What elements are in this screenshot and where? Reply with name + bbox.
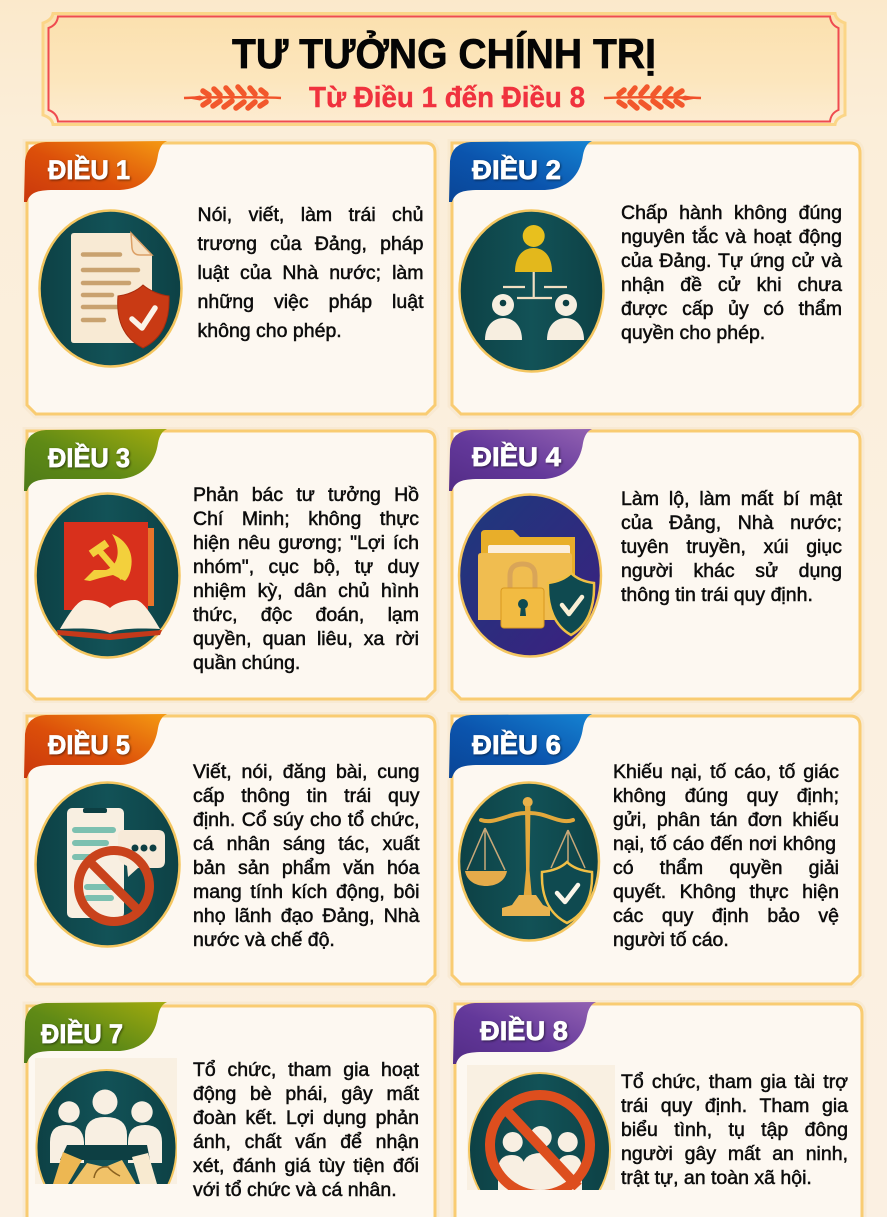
ribbon label bbox=[24, 1002, 167, 1063]
ribbon label: ĐIỀU 4 bbox=[472, 441, 561, 472]
text: Điều 6: không đúng quy định; bbox=[613, 785, 839, 807]
text: Điều 3: quyền, quan liêu, xa rời bbox=[193, 628, 419, 650]
text: Điều 6: nại, tố cáo đến nơi không bbox=[613, 833, 836, 855]
icon: phone with prohibition sign bbox=[34, 781, 181, 948]
icon: scales of justice with shield bbox=[458, 781, 600, 942]
panel: Điều 6 bbox=[448, 712, 864, 988]
text: Điều 6: người tố cáo. bbox=[613, 929, 729, 951]
text: Điều 4: của Đảng, Nhà nước; bbox=[621, 512, 842, 534]
icon: document with shield bbox=[38, 209, 183, 368]
text: Điều 5 bbox=[192, 761, 420, 951]
text: Điều 3: Phản bác tư tưởng Hồ bbox=[193, 484, 419, 506]
panel: Điều 1 bbox=[22, 139, 440, 418]
text: Điều 2: nguyên tắc và hoạt động bbox=[621, 226, 842, 248]
text: Điều 6: Khiếu nại, tố cáo, tố giác bbox=[613, 761, 839, 783]
icon: locked folder with shield bbox=[458, 493, 602, 658]
ribbon label: ĐIỀU 6 bbox=[472, 729, 561, 760]
ribbon label bbox=[24, 141, 167, 202]
icon: red book with hammer and sickle bbox=[34, 492, 181, 659]
icon: hierarchy of people bbox=[458, 209, 605, 373]
banner frame bbox=[42, 12, 846, 126]
subtitle with wheat ornaments: Từ Điều 1 đến Điều 8 bbox=[309, 82, 585, 114]
text: Điều 5: nước và chế độ. bbox=[193, 929, 335, 951]
ribbon label bbox=[449, 429, 592, 491]
text: Điều 6 bbox=[613, 761, 839, 951]
text: Điều 6: gửi, phân tán đơn khiếu bbox=[613, 809, 839, 831]
text: Điều 2: nhận đề cử khi chưa bbox=[621, 274, 842, 296]
text: Điều 6: các quy định bảo vệ bbox=[613, 905, 839, 927]
ribbon label: ĐIỀU 2 bbox=[472, 154, 561, 185]
card frame bbox=[22, 139, 440, 418]
text: Điều 5: Viết, nói, đăng bài, cung bbox=[193, 761, 420, 783]
card frame bbox=[22, 1002, 440, 1217]
card frame bbox=[448, 139, 864, 418]
text: Điều 7: động bè phái, gây mất bbox=[193, 1083, 419, 1105]
text: Điều 1: Nói, viết, làm trái chủ bbox=[198, 204, 424, 226]
text: Điều 4 bbox=[621, 488, 842, 606]
panel: Điều 5 bbox=[22, 712, 440, 988]
text: Điều 7 bbox=[192, 1059, 420, 1201]
card frame bbox=[22, 712, 440, 988]
ribbon label bbox=[24, 714, 167, 778]
text: Điều 2: quyền cho phép. bbox=[621, 322, 765, 344]
subtitle with wheat ornaments bbox=[184, 82, 702, 114]
text: Điều 5: định. Cổ súy cho tổ chức, bbox=[193, 809, 420, 831]
ribbon label: ĐIỀU 1 bbox=[48, 154, 130, 185]
text: Điều 3: nhóm", cục bộ, tự duy bbox=[193, 556, 419, 578]
ribbon label bbox=[453, 1002, 598, 1068]
text: Điều 4: Làm lộ, làm mất bí mật bbox=[621, 488, 842, 510]
text: Điều 3 bbox=[193, 484, 420, 674]
text: Điều 5: bản sản phẩm văn hóa bbox=[193, 857, 420, 879]
ribbon label bbox=[24, 429, 167, 491]
text: Điều 2: Chấp hành không đúng bbox=[621, 202, 842, 224]
text: Điều 7: với tổ chức và cá nhân. bbox=[193, 1179, 397, 1201]
title: TƯ TƯỞNG CHÍNH TRỊ bbox=[232, 30, 656, 77]
header banner bbox=[42, 12, 846, 126]
text: Điều 5: mang tính kích động, bôi bbox=[193, 881, 420, 903]
ribbon label: ĐIỀU 7 bbox=[41, 1018, 123, 1049]
text: Điều 4: thông tin trái quy định. bbox=[621, 584, 813, 606]
text: Điều 2: của Đảng. Tự ứng cử và bbox=[621, 250, 842, 272]
text: Điều 7: xét, đánh giá tùy tiện đối bbox=[193, 1155, 419, 1177]
text: Điều 4: người khác sử dụng bbox=[621, 560, 842, 582]
panel: Điều 8 bbox=[450, 1000, 866, 1217]
text: Điều 5: cá nhân sáng tác, xuất bbox=[193, 833, 420, 855]
text: Điều 1: những việc pháp luật bbox=[198, 291, 424, 313]
icon: group of people and handshake bbox=[35, 1058, 177, 1184]
text: Điều 7: đoàn kết. Lợi dụng phản bbox=[193, 1107, 419, 1129]
text: Điều 8 bbox=[621, 1070, 848, 1190]
text: Điều 8: trái quy định. Tham gia bbox=[621, 1095, 848, 1117]
text: Điều 3: thức, độc đoán, lạm bbox=[193, 604, 419, 626]
text: Điều 5: cấp thông tin trái quy bbox=[193, 785, 420, 807]
panel: Điều 4 bbox=[448, 427, 864, 703]
text: Điều 3: hiện nêu gương; "Lợi ích bbox=[193, 532, 419, 554]
text: Điều 2: được cấp ủy có thẩm bbox=[621, 298, 842, 320]
text: Điều 3: quần chúng. bbox=[193, 652, 300, 674]
text: Điều 1 bbox=[198, 204, 424, 342]
panel: Điều 7 bbox=[22, 1002, 440, 1217]
text: Điều 8: biểu tình, tụ tập đông bbox=[621, 1119, 848, 1141]
text: Điều 7: ánh, chất vấn để nhận bbox=[193, 1131, 419, 1153]
ribbon label: ĐIỀU 5 bbox=[48, 729, 130, 760]
card frame bbox=[448, 427, 864, 703]
panel: Điều 3 bbox=[22, 427, 440, 703]
ribbon label bbox=[449, 141, 592, 202]
text: Điều 6: quyết. Không thực hiện bbox=[613, 881, 839, 903]
text: Điều 8: người gây mất an ninh, bbox=[621, 1143, 848, 1165]
text: Điều 1: không cho phép. bbox=[198, 320, 342, 342]
card frame bbox=[448, 712, 864, 988]
text: Điều 7: Tổ chức, tham gia hoạt bbox=[193, 1059, 419, 1081]
text: Điều 5: nhọ lãnh đạo Đảng, Nhà bbox=[193, 905, 420, 927]
text: Điều 3: Chí Minh; không thực bbox=[193, 508, 419, 530]
text: Điều 4: tuyên truyền, xúi giục bbox=[621, 536, 842, 558]
text: Điều 3: nhiệm kỳ, dân chủ hình bbox=[193, 580, 419, 602]
text: Điều 6: có thẩm quyền giải bbox=[613, 857, 839, 879]
ribbon label bbox=[449, 714, 592, 778]
panel: Điều 2 bbox=[448, 139, 864, 418]
text: Điều 8: trật tự, an toàn xã hội. bbox=[621, 1167, 812, 1189]
icon: crowd with prohibition sign bbox=[467, 1065, 615, 1190]
text: Điều 1: trương của Đảng, pháp bbox=[198, 233, 424, 255]
ribbon label: ĐIỀU 8 bbox=[480, 1015, 568, 1046]
card frame bbox=[449, 1000, 867, 1217]
card frame bbox=[22, 427, 440, 703]
text: Điều 2 bbox=[621, 202, 842, 344]
text: Điều 1: luật của Nhà nước; làm bbox=[198, 262, 424, 284]
text: Điều 8: Tổ chức, tham gia tài trợ bbox=[621, 1071, 848, 1093]
ribbon label: ĐIỀU 3 bbox=[48, 442, 130, 473]
